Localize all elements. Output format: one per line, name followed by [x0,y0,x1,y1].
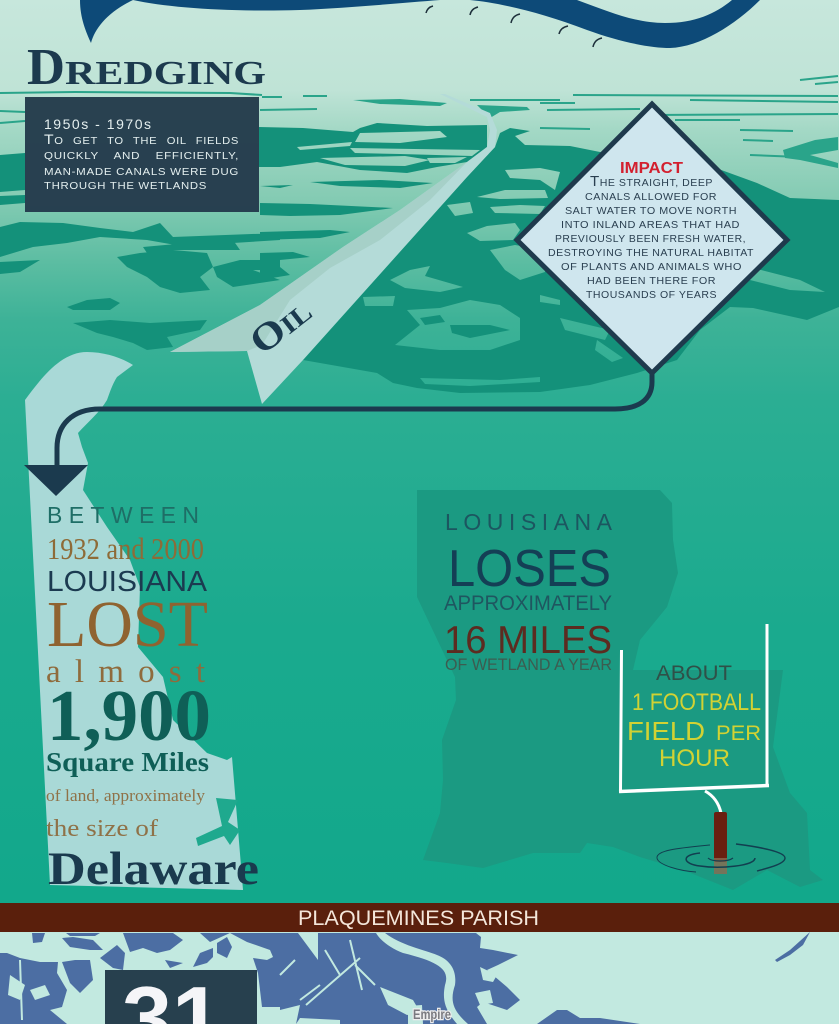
panel: dredging dates [25,97,259,212]
text block: land lost: LOST [47,588,208,661]
text block: football field [627,662,761,772]
title: Dredging: REDGING [65,55,266,92]
dredging text: TO GET TO THE OIL FIELDS [44,131,239,147]
text block: football field: ABOUT [656,662,732,685]
text block: Louisiana loses: LOUISIANA [445,509,613,535]
banner heading: PLAQUEMINES PARISH [298,907,539,930]
text block: Louisiana loses: LOSES [448,540,611,598]
text block: land lost: of land, approximately [46,786,206,805]
text block: land lost: the size of [46,816,158,842]
Plaquemines map [0,932,839,1024]
text block: Louisiana loses [444,509,613,674]
impact heading: IMPACT [620,160,683,177]
text block: land lost: LOUISIANA [47,566,208,598]
text block: land lost: 1,900 [47,675,211,756]
text block: Louisiana loses: OF WETLAND A YEAR [445,656,612,674]
impact text: PREVIOUSLY BEEN FRESH WATER, [555,233,746,245]
text block: football field: HOUR [659,745,730,772]
impact text: HAD BEEN THERE FOR [587,275,716,287]
impact text: THE STRAIGHT, DEEP [590,173,713,190]
ripples [657,845,710,872]
text block: land lost: BETWEEN [47,502,199,528]
marsh aerial image [0,76,839,393]
text block: land lost: Square Miles [46,747,209,777]
title: Dredging: D [27,39,65,96]
panel: Plaquemines banner [0,903,839,932]
river ribbon [80,0,760,48]
text block: football field: 1 FOOTBALL [632,689,761,716]
connector arrow [24,372,652,496]
text block: football field: PER [716,722,761,745]
text block: land lost: Delaware [48,843,259,895]
impact text: OF PLANTS AND ANIMALS WHO [561,261,742,273]
post [714,812,727,862]
impact text [548,173,754,301]
text block: land lost: 1932 and 2000 [47,531,204,566]
birds [426,6,602,47]
map label: Empire: Empire [413,1007,451,1022]
impact text: INTO INLAND AREAS THAT HAD [561,219,740,231]
goalpost [619,624,785,874]
label: OIL: OIL [242,289,320,363]
dredging text: THROUGH THE WETLANDS [44,181,207,192]
Delaware cutout [196,798,240,846]
dredging text: MAN-MADE CANALS WERE DUG [44,167,239,178]
dredging text: QUICKLY AND EFFICIENTLY, [44,151,239,162]
Delaware shape [25,352,243,890]
dredging text [44,131,239,192]
impact text: DESTROYING THE NATURAL HABITAT [548,247,754,259]
text block: land lost [46,502,259,895]
impact text: SALT WATER TO MOVE NORTH [565,205,737,217]
Louisiana map [417,490,823,890]
text block: Louisiana loses: APPROXIMATELY [444,592,612,615]
pale water patches over land [363,168,825,386]
panel: statistic box [105,968,257,1024]
impact diamond [517,104,787,373]
impact text: THOUSANDS OF YEARS [586,289,717,301]
impact text: CANALS ALLOWED FOR [585,191,717,203]
text block: Louisiana loses: 16 MILES [444,619,612,662]
title: Dredging [27,39,266,96]
oil canal [170,94,497,404]
text block: football field: FIELD [627,716,705,746]
date heading: 1950s - 1970s [44,116,151,132]
text block: land lost: almost [46,654,205,690]
